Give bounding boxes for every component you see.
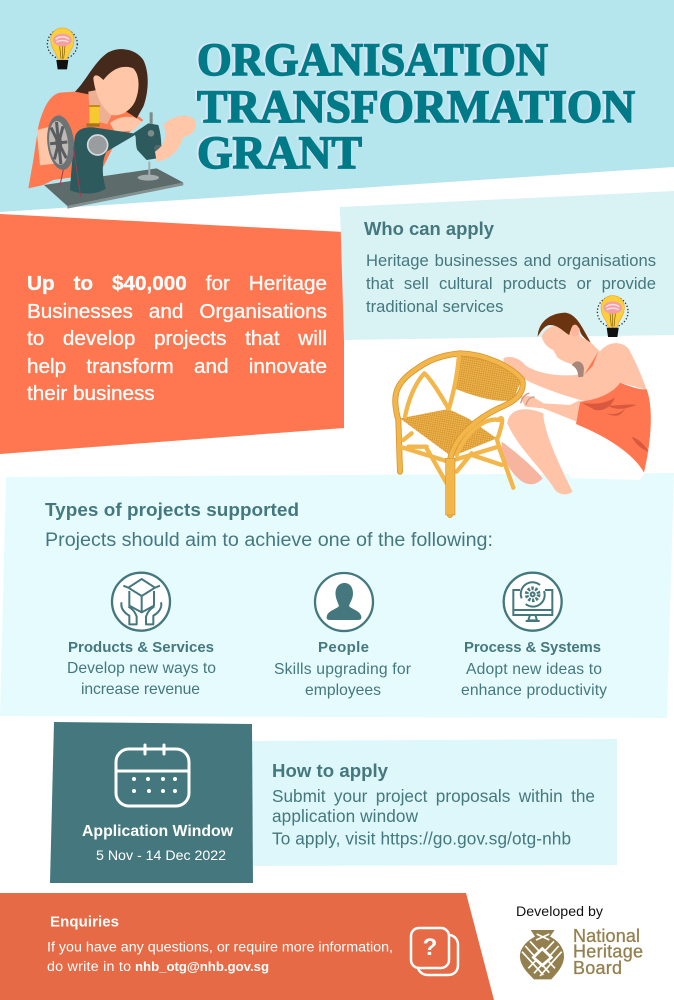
panel: types of projects supported [0,473,674,718]
text: products description: Develop new ways to [67,660,216,677]
title: TRANSFORMATION [197,81,635,133]
panel: who can apply [340,191,674,340]
title: GRANT [197,127,362,179]
heading: application window: Application Window [82,823,234,840]
title [195,33,635,179]
text: people description: Skills upgrading for [274,661,411,678]
face [93,67,139,115]
heading: enquiries: Enquiries [50,914,119,930]
logo: national heritage board vase [520,930,564,979]
logo text: national heritage board: Heritage [573,942,643,962]
text: grant description: help transform and innovate [27,354,327,378]
heading: types of projects: Types of projects supported [45,500,299,521]
icon: light bulb with brain [47,28,77,69]
chair [395,353,523,515]
illustration: woman at sewing machine [28,28,196,209]
text: process description: Adopt new ideas to [466,661,602,678]
text: enquiries details: If you have any questions, or require more information, [47,940,393,956]
logo text: national heritage board: Board [573,958,622,978]
icon: person [315,573,373,631]
icon: light bulb with brain [597,296,628,337]
text: grant description: Businesses and Organisations [27,300,327,322]
text: developed by: Developed by [516,904,604,920]
text: grant description [27,270,327,415]
text: application instructions [272,786,595,848]
panel: application window [50,722,253,883]
text: eligibility: traditional services [366,297,503,316]
panel: enquiries [0,893,494,1000]
item: products and services [67,573,216,698]
illustration: man weaving rattan chair [395,296,651,515]
text: process description: enhance productivity [461,682,607,699]
title: TRANSFORMATION [195,80,633,132]
text: process description [461,661,607,699]
text: grant description: Up to $40,000 for Heritage [27,272,327,295]
label: products and services: Products & Services [68,639,214,656]
icon: box held by hands [112,573,170,631]
hand with thread [155,116,196,162]
text: application instructions: To apply, visit https://go.gov.sg/otg-nhb [272,828,571,848]
text: application dates: 5 Nov - 14 Dec 2022 [96,848,226,864]
arms [37,117,142,165]
text: projects subtitle: Projects should aim to achieve one of the following: [45,529,493,551]
icon: monitor with gear [504,573,562,631]
icon: question mark cards: ? [423,934,437,961]
item: people [274,573,411,699]
text: eligibility [366,250,656,320]
title: GRANT [195,126,360,178]
icon: question mark cards [411,928,458,975]
credit: developed by national heritage board [516,904,643,979]
heading: who can apply: Who can apply [364,218,495,239]
neck [88,90,112,124]
text: products description [67,660,216,698]
shirt [28,91,143,188]
panel: how to apply [252,739,617,866]
sewing machine [44,105,183,209]
heading: how to apply: How to apply [272,760,389,781]
logo text: national heritage board: National [573,926,640,946]
title: ORGANISATION [197,34,548,86]
text: people description [274,661,411,699]
title: ORGANISATION [195,33,546,85]
text: enquiries details: nhb_otg@nhb.gov.sg [135,959,269,974]
text: grant description: their business [27,382,155,405]
icon: calendar [116,745,189,806]
panel: header banner [0,0,674,212]
logo text: national heritage board [573,926,643,978]
text: eligibility: that sell cultural products or provide [366,274,656,293]
panel: grant amount [0,214,344,454]
hair [75,49,148,118]
text: eligibility: Heritage businesses and organisations [366,251,656,270]
text: enquiries details [47,940,393,975]
item: process and systems [461,573,607,699]
person [501,313,651,494]
label: process and systems: Process & Systems [464,640,601,656]
text: people description: employees [305,682,381,699]
text: grant description: to develop projects that will [27,327,327,350]
text: application instructions: Submit your project proposals within the [272,786,595,806]
text: application instructions: application window [272,806,419,826]
label: people: People [318,639,369,656]
text: products description: increase revenue [81,681,200,698]
text: enquiries details: do write in to [47,959,131,975]
